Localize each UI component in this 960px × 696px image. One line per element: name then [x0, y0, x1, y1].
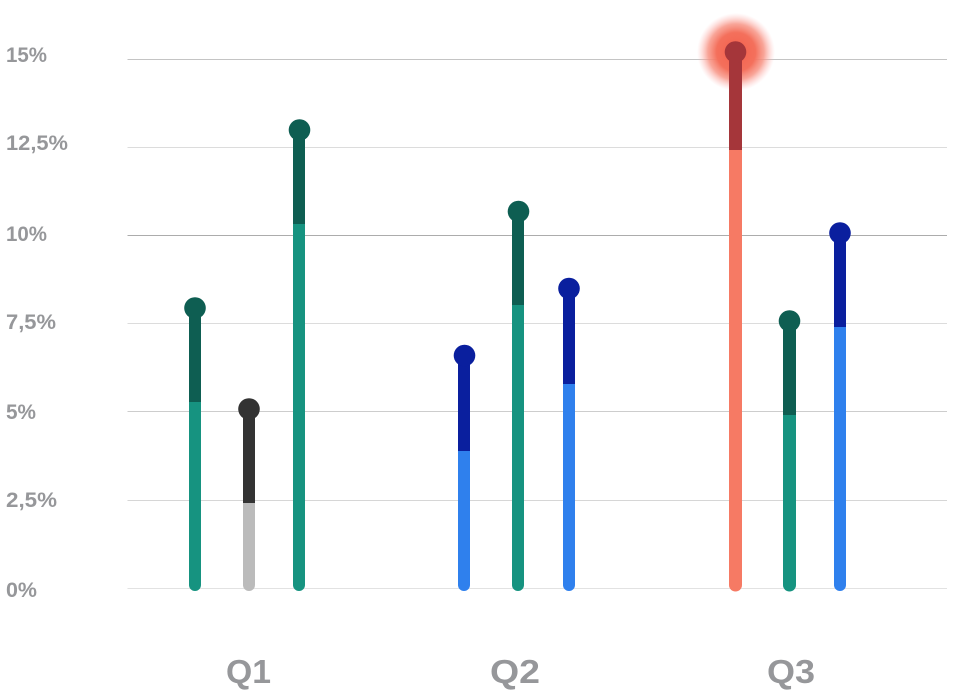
y-axis labels: 2,5% — [6, 489, 57, 512]
quarter labels — [226, 653, 815, 690]
Q2 lollipop 3 — [558, 278, 580, 591]
y-axis labels: 7,5% — [6, 311, 56, 334]
Q3 highlighted lollipop with glow — [697, 13, 775, 592]
y-axis labels: 0% — [6, 579, 37, 602]
quarter labels: Q3 — [767, 653, 815, 690]
quarter labels: Q1 — [226, 653, 271, 690]
y-axis labels: 12,5% — [6, 132, 68, 155]
Q3 lollipop 2 — [779, 310, 800, 592]
Q1 lollipop 1 — [184, 297, 206, 591]
y-axis labels — [6, 44, 68, 602]
Q1 lollipop 3 — [289, 119, 310, 591]
quarter labels: Q2 — [490, 653, 540, 690]
y-axis labels: 15% — [6, 44, 47, 67]
y-axis labels: 5% — [6, 401, 36, 424]
Q2 lollipop 2 — [508, 201, 529, 591]
Q2 lollipop 1 — [454, 345, 475, 591]
y-axis labels: 10% — [6, 223, 47, 246]
Q3 lollipop 3 — [829, 222, 851, 591]
Q1 lollipop 2 — [238, 398, 260, 591]
